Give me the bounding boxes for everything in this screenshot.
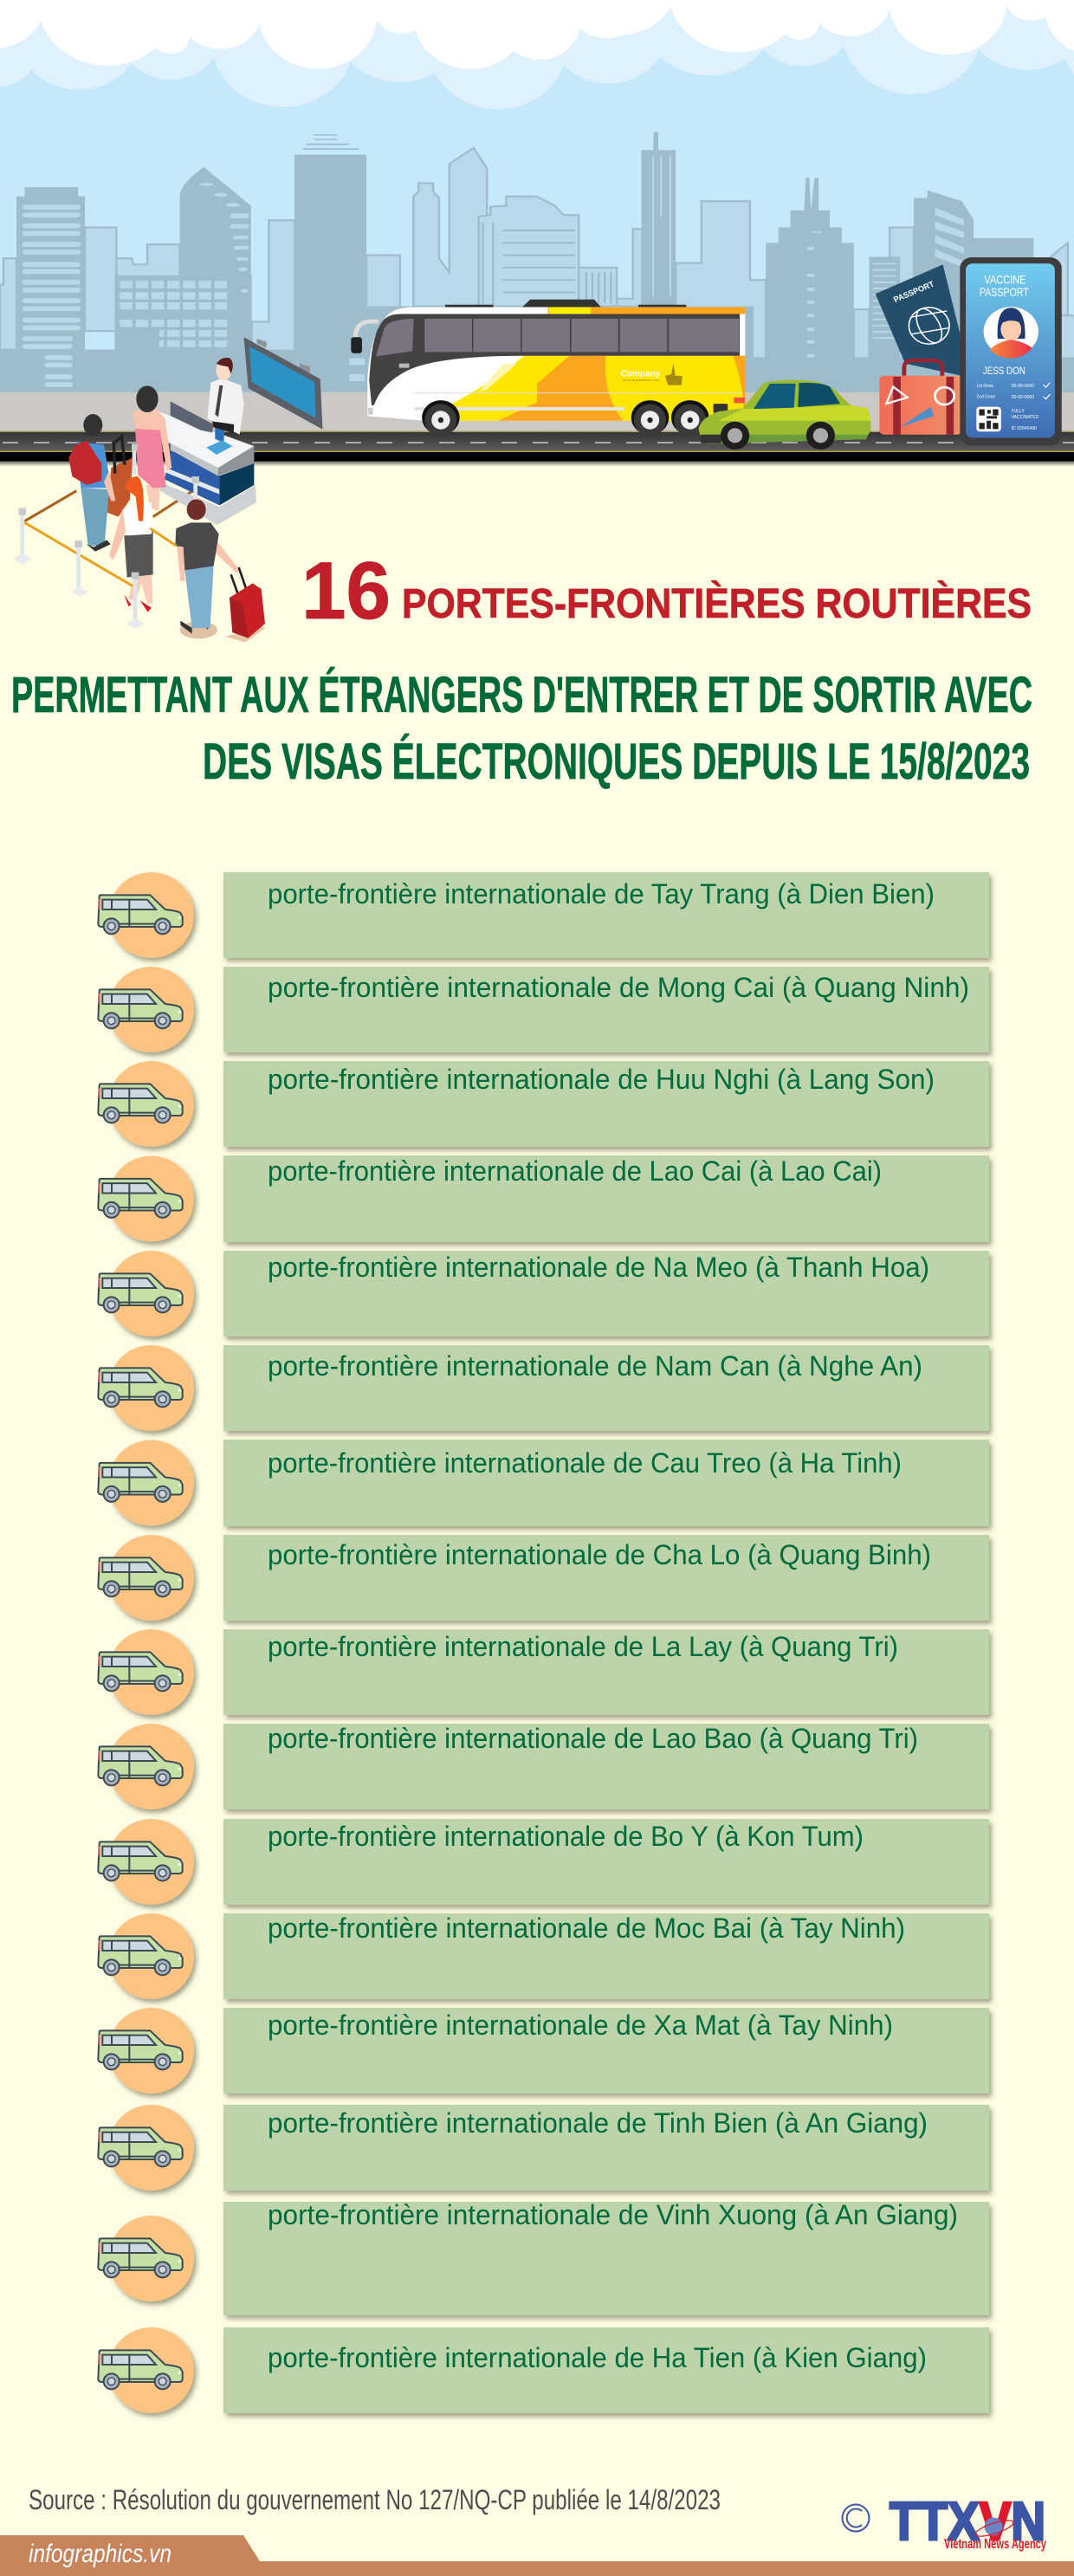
illustration: passport [876,264,961,376]
row 8 van icon [98,1557,183,1596]
illustration: vaccine passport phone: 00-00-0000 [1012,395,1034,400]
row 13 van icon [98,2030,183,2069]
traveller with red case [175,499,240,638]
row 14 panel [223,2105,989,2191]
row 1 text: porte-frontière internationale de Tay Trang (à Dien Bien) [268,878,935,909]
road [0,431,1074,466]
row 8: Cha Lo [98,1535,989,1621]
row 7: Cau Treo [98,1440,989,1526]
row 11: Bo Y [98,1819,989,1905]
illustration: passport: PASSPORT [892,280,936,305]
footer site name: infographics.vn [29,2540,171,2568]
row 4 text: porte-frontière internationale de Lao Cai (à Lao Cai) [268,1155,882,1187]
orange suitcase [107,457,133,517]
row 15: Vinh Xuong [98,2199,989,2315]
row 3 panel [223,1061,989,1147]
illustration: vaccine passport phone: 2nd Dose [976,394,995,399]
row 9 van icon [98,1652,183,1691]
row 4 panel [223,1155,989,1242]
row 8 text: porte-frontière internationale de Cha Lo (à Quang Binh) [268,1539,931,1570]
row 11 badge [108,1819,194,1905]
row 2 text: porte-frontière internationale de Mong Cai (à Quang Ninh) [268,972,969,1003]
sky [0,0,1074,398]
row 12 panel [223,1913,989,1999]
rope barrier, rear [24,491,193,521]
row 3 badge [108,1061,194,1147]
illustration: vaccine passport phone: VACCINE [984,274,1026,287]
row 4 van icon [98,1179,183,1218]
row 15 badge [108,2216,194,2301]
illustration: vaccine passport phone: VACCINATED [1012,415,1038,420]
rope barrier, front [24,522,176,586]
row 16 badge [108,2327,194,2413]
check-in counter [156,401,256,525]
row 13 badge [108,2008,194,2094]
row 11 panel [223,1819,989,1905]
row 11 van icon [98,1841,183,1880]
row 15 panel [223,2202,989,2315]
row 7 panel [223,1440,989,1526]
row 5 panel [223,1251,989,1337]
row 6 badge [108,1345,194,1431]
illustration: vaccine passport phone: ID 92849490 [1012,426,1037,431]
row 16 panel [223,2327,989,2413]
row 12: Moc Bai [98,1913,989,1999]
illustration: vaccine passport phone: FULLY [1012,409,1025,414]
row 1: Tay Trang [98,872,989,958]
row 5 text: porte-frontière internationale de Na Meo (à Thanh Hoa) [268,1252,929,1283]
row 7 badge [108,1440,194,1526]
heading: number 16: 16 [301,545,391,636]
row 6 van icon [98,1368,183,1407]
row 7 text: porte-frontière internationale de Cau Treo (à Ha Tinh) [268,1447,902,1479]
illustration: green car [699,380,871,450]
row 9 badge [108,1629,194,1715]
row 14: Tinh Bien [98,2105,989,2191]
row 16 van icon [98,2350,183,2389]
row 6 text: porte-frontière internationale de Nam Can (à Nghe An) [268,1350,922,1382]
row 3 text: porte-frontière internationale de Huu Nghi (à Lang Son) [268,1064,935,1095]
sidewalk [0,392,1074,431]
row 8 badge [108,1535,194,1621]
traveller with backpack [68,414,115,552]
illustration: vaccine passport phone: JESS DON [983,365,1025,377]
row 13 panel [223,2008,989,2094]
row 10 badge [108,1724,194,1809]
row 1 badge [108,872,194,958]
row 2 panel [223,967,989,1052]
traveller in pink dress [133,385,171,511]
row 10: Lao Bao [98,1723,989,1809]
row 3 van icon [98,1084,183,1123]
row 10 text: porte-frontière internationale de Lao Bao (à Quang Tri) [268,1723,918,1754]
row 4: Lao Cai [98,1155,989,1242]
row 5 badge [108,1251,194,1337]
row 14 badge [108,2105,194,2191]
row 13: Xa Mat [98,2008,989,2094]
row 12 badge [108,1913,194,1999]
row 11 text: porte-frontière internationale de Bo Y (à Kon Tum) [268,1821,864,1852]
row 13 text: porte-frontière internationale de Xa Mat (à Tay Ninh) [268,2010,893,2041]
row 12 van icon [98,1936,183,1975]
illustration: suitcase [879,360,961,435]
row 12 text: porte-frontière internationale de Moc Bai (à Tay Ninh) [268,1913,905,1944]
row 6 panel [223,1345,989,1431]
illustration: check-in queue [13,358,266,643]
TTXVN logo: TTXVN [890,2492,1045,2552]
row 16: Ha Tien [98,2327,989,2413]
illustration: vaccine passport phone: PASSPORT [980,287,1029,300]
row 2: Mong Cai [98,967,989,1052]
clouds [0,0,1074,109]
illustration: coach bus: companywebsite.com [623,378,660,382]
row 10 panel [223,1724,989,1809]
source note: Source : Résolution du gouvernement No 127/NQ-CP publiée le 14/8/2023 [29,2484,721,2515]
row 9 panel [223,1629,989,1715]
copyright mark [842,2505,870,2531]
row 15 text: porte-frontière internationale de Vinh Xuong (à An Giang) [268,2199,958,2230]
row 2 badge [108,967,194,1052]
traveller with red hair [109,476,153,612]
illustration: vaccine passport phone: 00-00-0000 [1012,384,1034,389]
row 1 van icon [98,895,183,934]
row 9 text: porte-frontière internationale de La Lay (à Quang Tri) [268,1631,898,1662]
row 10 van icon [98,1746,183,1785]
row 14 text: porte-frontière internationale de Tinh Bien (à An Giang) [268,2107,928,2139]
red suitcase [225,567,266,643]
row 7 van icon [98,1463,183,1502]
barrier posts [13,443,199,629]
row 8 panel [223,1535,989,1621]
illustration: vaccine passport phone: 1st Dose [976,384,993,389]
illustration: coach bus [351,300,745,437]
row 4 badge [108,1155,194,1242]
illustration: wall screen [244,337,322,430]
receptionist [207,358,244,435]
row 5: Na Meo [98,1251,989,1337]
row 6: Nam Can [98,1345,989,1431]
row 16 text: porte-frontière internationale de Ha Tien (à Kien Giang) [268,2342,927,2373]
row 5 van icon [98,1273,183,1312]
illustration: coach bus: Company [621,369,660,379]
row 2 van icon [98,989,183,1028]
row 9: La Lay [98,1629,989,1715]
row 3: Huu Nghi [98,1061,989,1147]
row 14 van icon [98,2127,183,2166]
row 15 van icon [98,2238,183,2277]
illustration: vaccine passport phone [960,257,1062,445]
row 1 panel [223,872,989,958]
footer band [0,2535,1074,2576]
city skyline [0,132,1074,393]
